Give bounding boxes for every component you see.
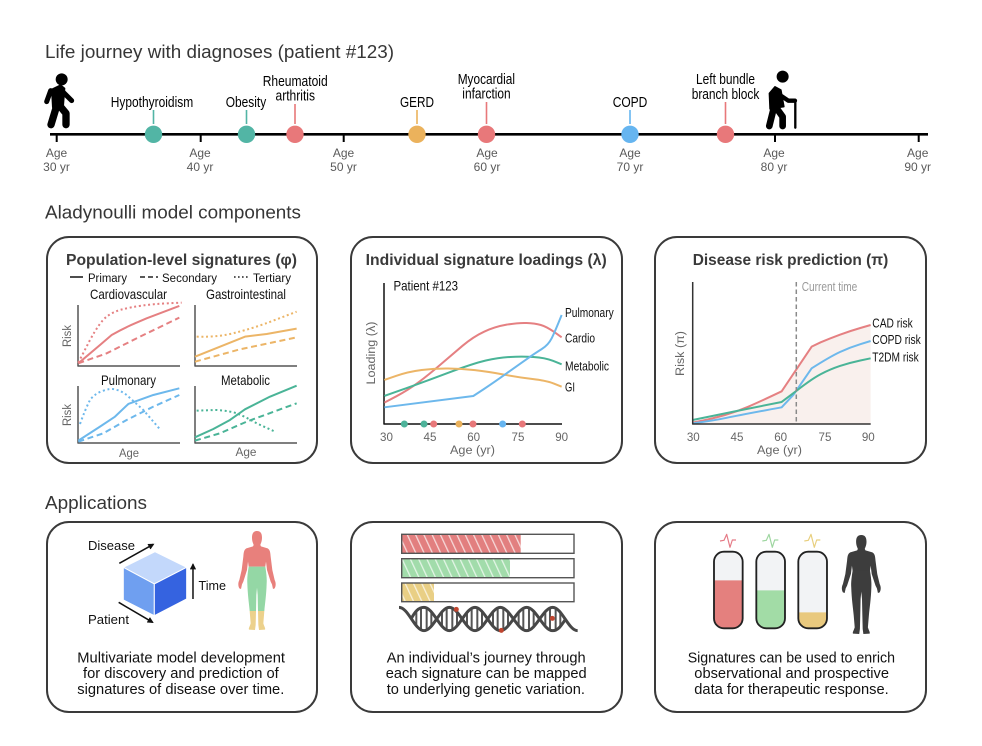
chart: loadings over age: Patient #123 (394, 278, 458, 294)
chart: gastrointestinal: Gastrointestinal (206, 286, 286, 302)
event: left bundle branch block (692, 72, 760, 143)
chart: loadings over age: Loading (λ) (364, 322, 378, 384)
caption: Signatures can be used to enrich (688, 651, 895, 667)
event: myocardial infarction: infarction (462, 86, 511, 102)
event: myocardial infarction (458, 72, 515, 143)
panel: individual signature loadings (351, 237, 622, 463)
panel: multivariate model development (47, 522, 317, 712)
chart: loadings over age: Cardio (565, 331, 595, 346)
axis labels: Risk (60, 324, 74, 347)
panel: therapeutic response (655, 522, 926, 712)
chart: risk over age: 30 (687, 431, 700, 444)
age labels: Age (189, 146, 211, 160)
bar: yellow signature (402, 583, 574, 602)
tube: green signature (756, 534, 785, 628)
chart: gastrointestinal (195, 286, 297, 366)
event: hypothyroidism: Hypothyroidism (111, 95, 193, 111)
chart: cardiovascular (78, 286, 182, 366)
panel title: Disease risk prediction (π) (693, 252, 888, 269)
chart: cardiovascular: Cardiovascular (90, 286, 167, 302)
caption: An individual’s journey through (387, 651, 586, 667)
chart: risk over age (673, 280, 921, 457)
chart: loadings over age: GI (565, 380, 575, 395)
age labels: Age (907, 146, 929, 160)
event: left bundle branch block: branch block (692, 87, 760, 103)
axis labels: Risk (60, 403, 74, 426)
caption (77, 651, 285, 698)
age labels: 70 yr (617, 160, 643, 174)
caption: data for therapeutic response. (694, 682, 889, 698)
heading: life journey: Life journey with diagnoses (patient #123) (45, 42, 394, 63)
age labels: 90 yr (904, 160, 931, 174)
caption: to underlying genetic variation. (387, 682, 585, 698)
chart: risk over age: 75 (819, 431, 831, 444)
icon: human silhouette (842, 535, 881, 634)
chart: loadings over age: 75 (512, 431, 524, 444)
icon: data cube with axes: Patient (88, 612, 129, 627)
timeline axis (50, 134, 928, 142)
chart: risk over age: 60 (774, 431, 787, 444)
bar: red signature (402, 534, 574, 553)
panel title: Individual signature loadings (λ) (366, 252, 607, 269)
chart: loadings over age: 45 (424, 431, 436, 444)
bar: green signature (402, 559, 574, 578)
age labels (43, 146, 931, 174)
chart: pulmonary: Pulmonary (101, 372, 156, 388)
caption (386, 651, 587, 698)
event: COPD (613, 95, 647, 143)
icon: human body by region (238, 531, 276, 630)
icon: data cube with axes: Disease (88, 538, 135, 553)
age labels: Age (619, 146, 641, 160)
age labels: Age (476, 146, 498, 160)
age labels: 30 yr (43, 160, 70, 174)
chart: risk over age: CAD risk (872, 316, 913, 331)
tube: yellow signature (798, 534, 827, 628)
line style legend: Tertiary (253, 273, 291, 285)
chart: risk over age: Age (yr) (757, 443, 802, 457)
age labels: Age (333, 146, 354, 160)
icon: older adult with cane (769, 71, 795, 128)
chart: loadings over age: Metabolic (565, 359, 609, 374)
event: left bundle branch block: Left bundle (696, 72, 755, 88)
age labels: Age (763, 146, 785, 160)
age labels: Age (46, 146, 67, 160)
chart: risk over age: 90 (862, 431, 875, 444)
panel: disease risk prediction (655, 237, 926, 463)
axis labels (60, 324, 257, 460)
chart: risk over age: T2DM risk (872, 350, 919, 365)
panel: population-level signatures (47, 237, 317, 463)
panel title: Population-level signatures (φ) (66, 252, 297, 269)
event: obesity (226, 95, 267, 143)
axis labels: Age (236, 445, 257, 459)
event: rheumatoid arthritis: Rheumatoid (263, 74, 328, 90)
icon: data cube with axes (88, 538, 226, 627)
event: COPD: COPD (613, 95, 647, 111)
section: life journey timeline (43, 42, 931, 174)
icon: walking adult (47, 73, 72, 125)
axis labels: Age (119, 446, 139, 460)
caption: signatures of disease over time. (77, 682, 284, 698)
chart: loadings over age: 30 (380, 431, 393, 444)
line style legend: Secondary (162, 273, 217, 285)
caption: Multivariate model development (77, 651, 285, 667)
event: GERD: GERD (400, 95, 434, 111)
caption (688, 651, 895, 698)
event: GERD (400, 95, 434, 143)
caption: each signature can be mapped (386, 666, 587, 682)
age labels: 60 yr (474, 160, 500, 174)
heading: model components: Aladynoulli model components (45, 202, 301, 224)
chart: loadings over age: Age (yr) (450, 443, 495, 457)
age labels: 40 yr (187, 160, 213, 174)
age labels: 50 yr (330, 160, 357, 174)
chart: pulmonary (78, 372, 180, 443)
chart: metabolic (195, 372, 297, 443)
tube: red signature (714, 534, 743, 628)
age labels: 80 yr (761, 160, 787, 174)
chart: risk over age: 45 (731, 431, 743, 444)
chart: risk over age: COPD risk (872, 332, 921, 347)
icon: DNA helix with variants (399, 607, 578, 633)
chart: loadings over age (364, 278, 614, 457)
event: myocardial infarction: Myocardial (458, 72, 515, 88)
line style legend: Primary (88, 273, 127, 285)
line style legend (70, 273, 291, 285)
heading: applications: Applications (45, 493, 147, 514)
event: obesity: Obesity (226, 95, 267, 111)
panel: genetic mapping (351, 522, 622, 712)
icon: data cube with axes: Time (198, 578, 226, 593)
event: hypothyroidism (111, 95, 193, 143)
event: rheumatoid arthritis: arthritis (276, 88, 315, 104)
caption: observational and prospective (694, 666, 889, 682)
chart: loadings over age: 90 (555, 431, 568, 444)
chart: loadings over age: Pulmonary (565, 305, 614, 320)
chart: risk over age: Risk (π) (673, 331, 687, 376)
event: rheumatoid arthritis (263, 74, 328, 143)
caption: for discovery and prediction of (83, 666, 280, 682)
chart: metabolic: Metabolic (221, 372, 270, 388)
chart: risk over age: Current time (802, 280, 857, 294)
chart: loadings over age: 60 (467, 431, 480, 444)
